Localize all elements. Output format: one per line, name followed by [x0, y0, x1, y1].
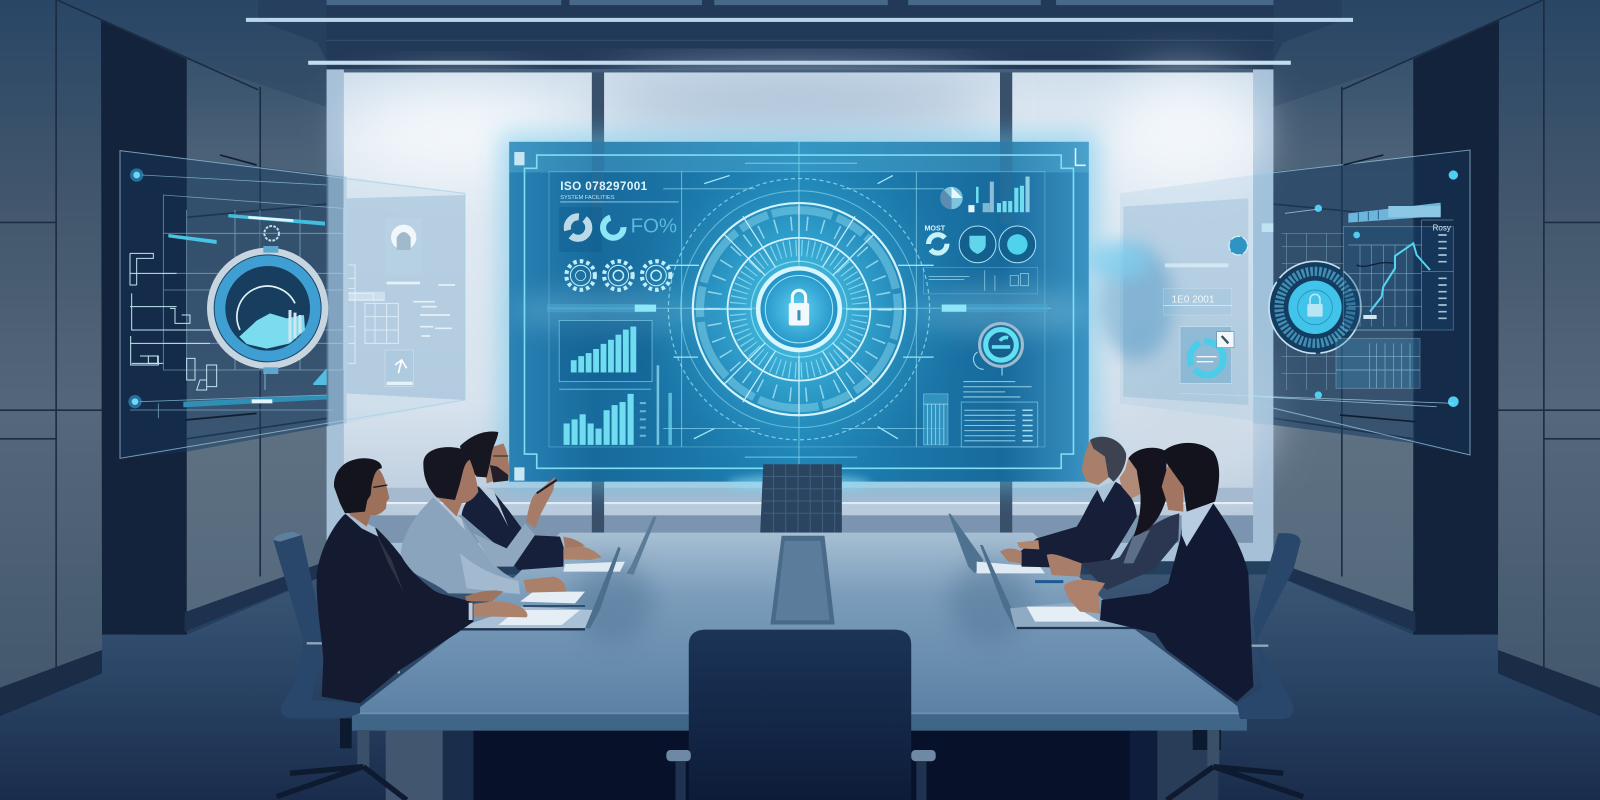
ring icon lower right — [973, 323, 1022, 376]
right chair — [1167, 533, 1303, 800]
main security dashboard screen — [500, 133, 1098, 491]
globe node — [1229, 236, 1248, 255]
donut card — [1180, 327, 1234, 383]
left chair — [273, 532, 407, 800]
top right chart — [940, 177, 1030, 212]
right team seated at table — [948, 437, 1303, 800]
screen frame — [524, 155, 1073, 468]
foreground centre chair — [666, 630, 936, 800]
donut metrics — [559, 207, 677, 252]
laptops and keyboards — [453, 517, 657, 629]
seated person 6 — [1063, 443, 1253, 702]
left team seated at table — [273, 431, 657, 800]
ISO heading: ISO 078297001 — [560, 180, 648, 193]
data card — [1163, 263, 1232, 315]
avatar card — [385, 218, 422, 284]
trend chart: Rosy — [1433, 224, 1451, 233]
right status bar — [941, 304, 1048, 312]
conference table — [352, 533, 1247, 731]
right block diagrams — [348, 265, 455, 387]
lock gauge — [1269, 261, 1361, 353]
right laptops and keyboards — [948, 513, 1135, 629]
top bar segments — [1348, 203, 1441, 223]
lower grid chart — [1336, 338, 1420, 388]
right holographic panel — [1090, 150, 1470, 455]
floor — [0, 574, 1600, 800]
status bars — [168, 214, 328, 407]
gauge circle — [210, 246, 325, 374]
ISO heading — [560, 180, 679, 202]
report lines and table — [961, 382, 1038, 447]
left status bar — [547, 304, 656, 312]
padlock — [758, 268, 840, 350]
ceiling light strips — [246, 18, 1353, 65]
seated person 2 — [399, 447, 566, 594]
MOST icons row: MOST — [924, 225, 946, 233]
mini column table — [923, 394, 948, 445]
right wall — [1273, 0, 1600, 716]
back centre chair — [760, 464, 842, 533]
MOST icons row — [924, 225, 1036, 263]
left wall — [0, 0, 327, 716]
schematic lines — [130, 253, 217, 390]
central lock dial — [668, 176, 934, 440]
left holographic panel — [120, 151, 465, 458]
glowing nodes — [1315, 170, 1459, 407]
under-table shadow and legs — [386, 731, 1218, 800]
trend chart — [1343, 220, 1453, 330]
seated person 1 — [317, 458, 527, 703]
seated person 4 — [1000, 437, 1137, 567]
seated person 5 — [1047, 448, 1179, 590]
bar chart lower — [559, 365, 672, 445]
right grid lines — [1282, 233, 1420, 390]
seated person 3 — [460, 431, 602, 570]
window — [327, 69, 1273, 561]
data card: 1E0 2001 — [1172, 295, 1215, 306]
bar chart upper — [559, 320, 652, 382]
right mid notes — [923, 267, 1038, 294]
ISO heading: SYSTEM FACILITIES — [560, 195, 615, 201]
glowing nodes — [130, 168, 143, 182]
gear icons — [566, 261, 670, 290]
donut metrics: FO% — [631, 216, 677, 238]
